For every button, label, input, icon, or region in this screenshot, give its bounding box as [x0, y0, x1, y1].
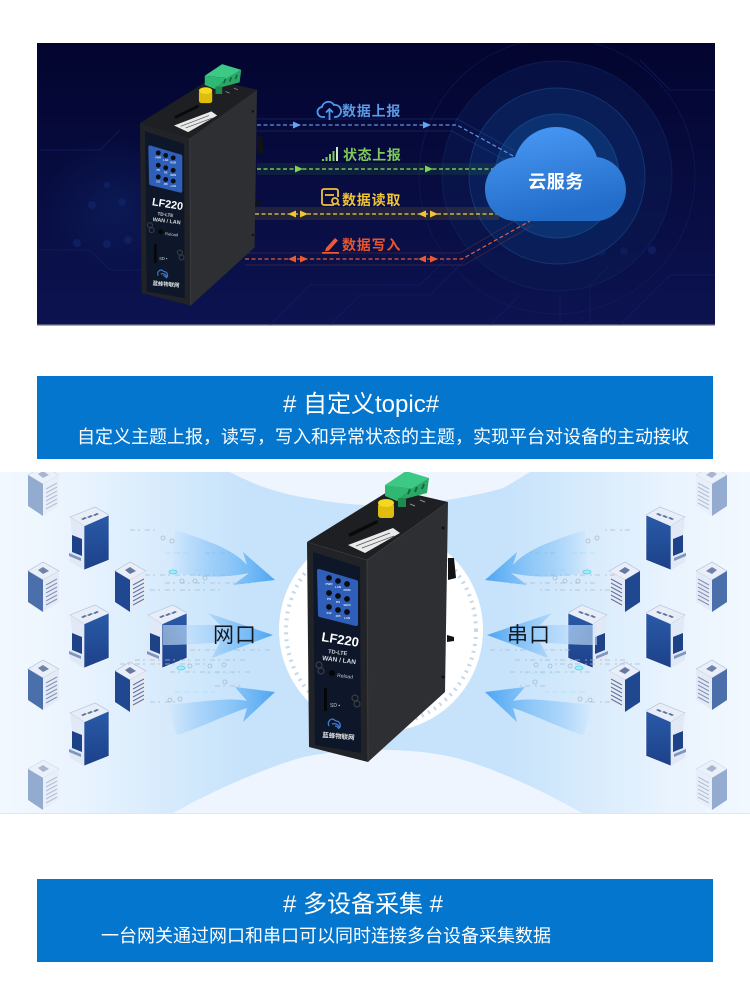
server cluster: right [568, 466, 727, 810]
status LED panel: RS [164, 172, 168, 175]
device: LF220 gateway centre: 蓝蜂物联网 [322, 729, 355, 742]
device: LF220 gateway centre: TD-LTE [328, 649, 348, 657]
data stream: right [490, 530, 640, 702]
light background blob: bottom [173, 750, 582, 813]
icon: cloud upload [317, 102, 341, 120]
status LED panel: LAN [163, 159, 168, 162]
device: LF220 gateway centre [307, 471, 456, 762]
label: serial port: 串口 [507, 624, 551, 647]
panel: cloud data reporting diagram [37, 43, 715, 326]
label: status report: 状态上报 [343, 147, 401, 163]
status LED panel: PS [327, 597, 331, 601]
label: data write: 数据写入 [342, 237, 401, 253]
status LED panel [150, 147, 181, 191]
device: LF220 gateway top: TD-LTE [157, 211, 174, 218]
device: LF220 gateway top: Reload [165, 231, 179, 237]
icon: pencil [322, 238, 339, 254]
label: ethernet port: 网口 [213, 624, 257, 647]
text: custom topic description: 自定义主题上报，读写，写入和异常状态的主题，实现平台对设备的主动接收 [77, 427, 689, 447]
server cluster: left [28, 466, 187, 810]
status LED panel: LAN [335, 585, 341, 589]
status LED panel: 485 [164, 183, 168, 186]
device: LF220 gateway top: SD ▪ [159, 256, 168, 261]
arrows: right, pointing to device [485, 530, 597, 735]
data stream: left [120, 530, 270, 702]
heading: multi-device collection: # 多设备采集 # [283, 891, 443, 918]
icon: document search [322, 189, 340, 206]
status LED panel: WAN [344, 603, 350, 607]
device: LF220 gateway top: 蓝蜂物联网 [152, 279, 180, 289]
device: LF220 gateway centre: WAN / LAN [322, 655, 357, 666]
concentric rings [419, 38, 695, 314]
status LED panel: WAN [170, 174, 176, 177]
label: data read: 数据读取 [342, 192, 401, 208]
banner: multi-device collection [37, 879, 713, 962]
device: LF220 gateway centre: Reload [337, 673, 353, 681]
icon: cloud service: 云服务 [528, 172, 584, 192]
device: LF220 gateway centre: LF220 [321, 629, 360, 650]
device: LF220 gateway top: WAN / LAN [152, 217, 181, 226]
status LED panel [319, 571, 356, 624]
status LED panel: 232 [326, 611, 332, 615]
icon: signal bars [322, 147, 338, 161]
heading: custom topic: # 自定义topic# [283, 391, 439, 418]
text: multi-device collection description: 一台网关通过网口和串口可以同时连接多台设备采集数据 [101, 926, 551, 946]
white circle behind device [279, 528, 483, 732]
light background blob: top [230, 472, 530, 505]
banner: custom topic [37, 376, 713, 459]
icon: cloud service [485, 127, 626, 221]
status LED panel: PS [157, 169, 160, 172]
connection: data write line [245, 215, 533, 265]
status LED panel: PWR [326, 582, 333, 586]
status LED panel: RS [336, 600, 340, 604]
device: LF220 gateway top: LF220 [151, 196, 184, 213]
status LED panel: RSSI [343, 588, 351, 592]
connection: data report line [257, 119, 515, 163]
connection: status report line [257, 163, 497, 175]
device: LF220 gateway centre: SD ▪ [330, 703, 340, 709]
arrows: left, pointing to device [163, 530, 275, 735]
status LED panel: 232 [156, 181, 161, 184]
label: data report: 数据上报 [342, 103, 401, 119]
device: LF220 gateway top [140, 64, 264, 306]
connection: data read line [255, 207, 499, 220]
status LED panel: LAN [344, 616, 350, 620]
status LED panel: RSSI [170, 162, 176, 165]
status LED panel: 485 [335, 614, 341, 618]
status LED panel: PWR [155, 157, 161, 160]
status LED panel: LAN [171, 185, 176, 188]
panel: multi-device collection diagram [0, 472, 750, 814]
